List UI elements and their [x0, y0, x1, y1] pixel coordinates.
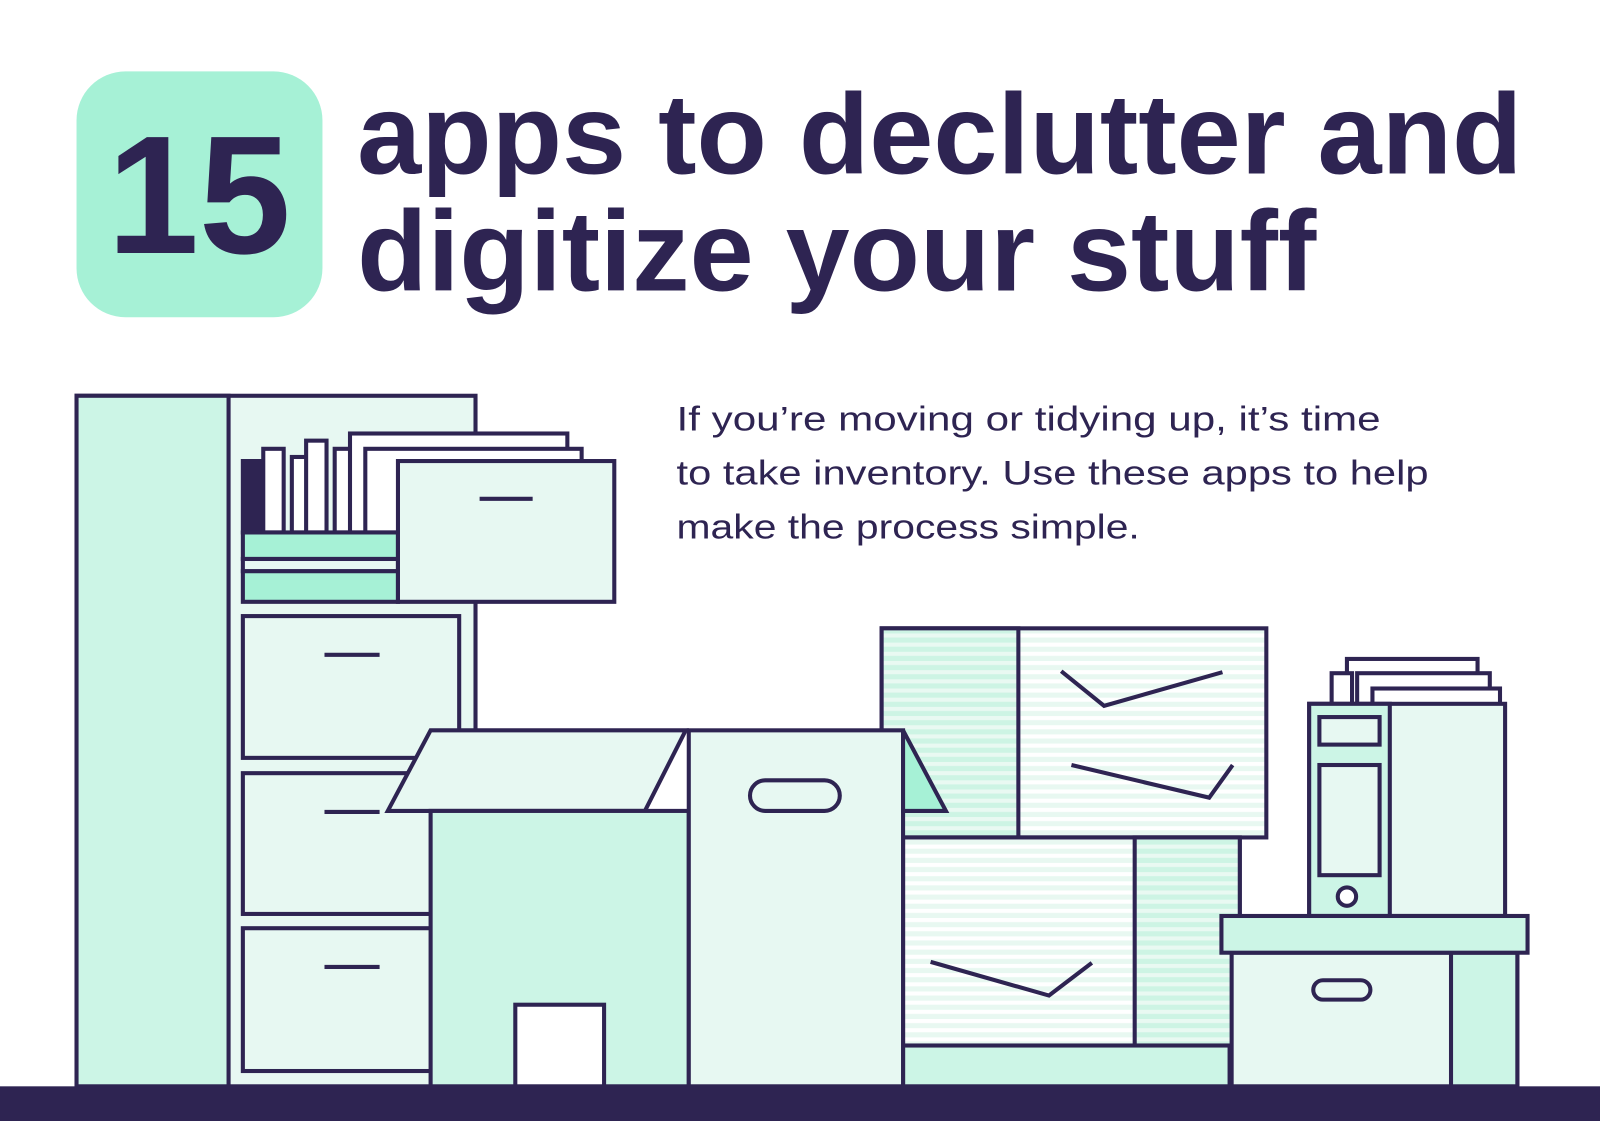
badge: 15	[77, 71, 322, 317]
open cardboard box	[388, 730, 946, 1086]
title	[357, 71, 1522, 316]
title: apps to declutter and	[357, 71, 1522, 198]
badge: 15: 15	[107, 101, 291, 289]
small drawer unit	[1221, 916, 1528, 1086]
open drawer with folders	[243, 434, 614, 602]
filing cabinet	[77, 396, 614, 1086]
intro paragraph	[677, 400, 1429, 547]
intro paragraph: to take inventory. Use these apps to help	[677, 455, 1429, 493]
intro paragraph: make the process simple.	[677, 509, 1140, 547]
intro paragraph: If you’re moving or tidying up, it’s time	[677, 400, 1381, 438]
binder and papers	[1309, 659, 1505, 916]
striped box stack	[882, 628, 1266, 1086]
floor	[0, 1086, 1600, 1121]
title: digitize your stuff	[357, 189, 1317, 316]
